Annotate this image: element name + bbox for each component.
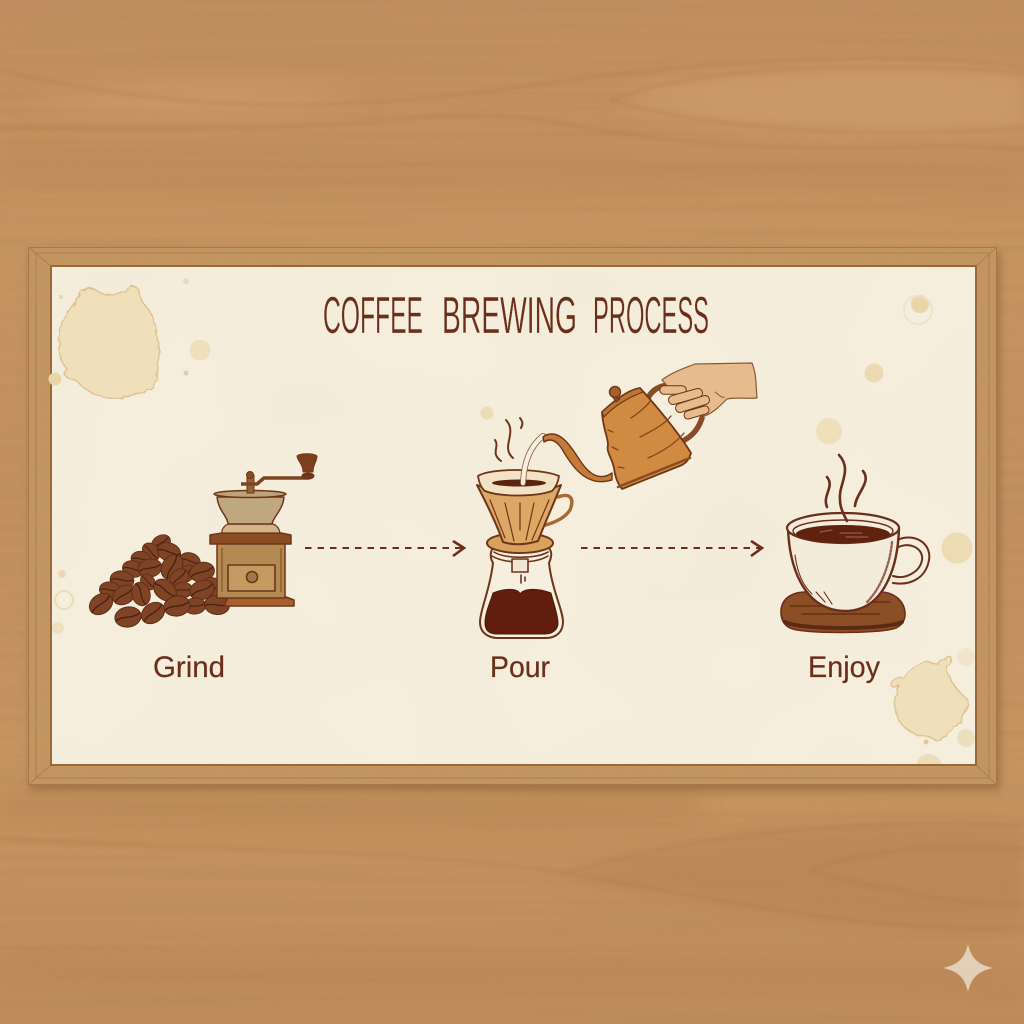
illustration: coffee cup on coaster [781, 455, 929, 632]
title: BREWING [442, 287, 577, 345]
illustration: coffee grinder [210, 454, 317, 606]
text: PROCESS [593, 287, 709, 345]
label: grind: Grind [153, 651, 225, 684]
title: COFFEE [323, 287, 423, 345]
title [323, 287, 709, 345]
illustration: pour over carafe [477, 418, 572, 638]
arrow: pour to enjoy [581, 541, 762, 556]
frame [28, 247, 1000, 790]
paper panel [52, 267, 975, 764]
icon: sparkle watermark [943, 944, 993, 992]
arrow: grind to pour [305, 541, 464, 556]
label: pour: Pour [490, 651, 550, 684]
coffee stains [48, 278, 975, 764]
illustration: coffee beans pile [85, 531, 230, 629]
illustration: hand holding kettle [543, 363, 757, 489]
label: enjoy: Enjoy [808, 651, 880, 684]
